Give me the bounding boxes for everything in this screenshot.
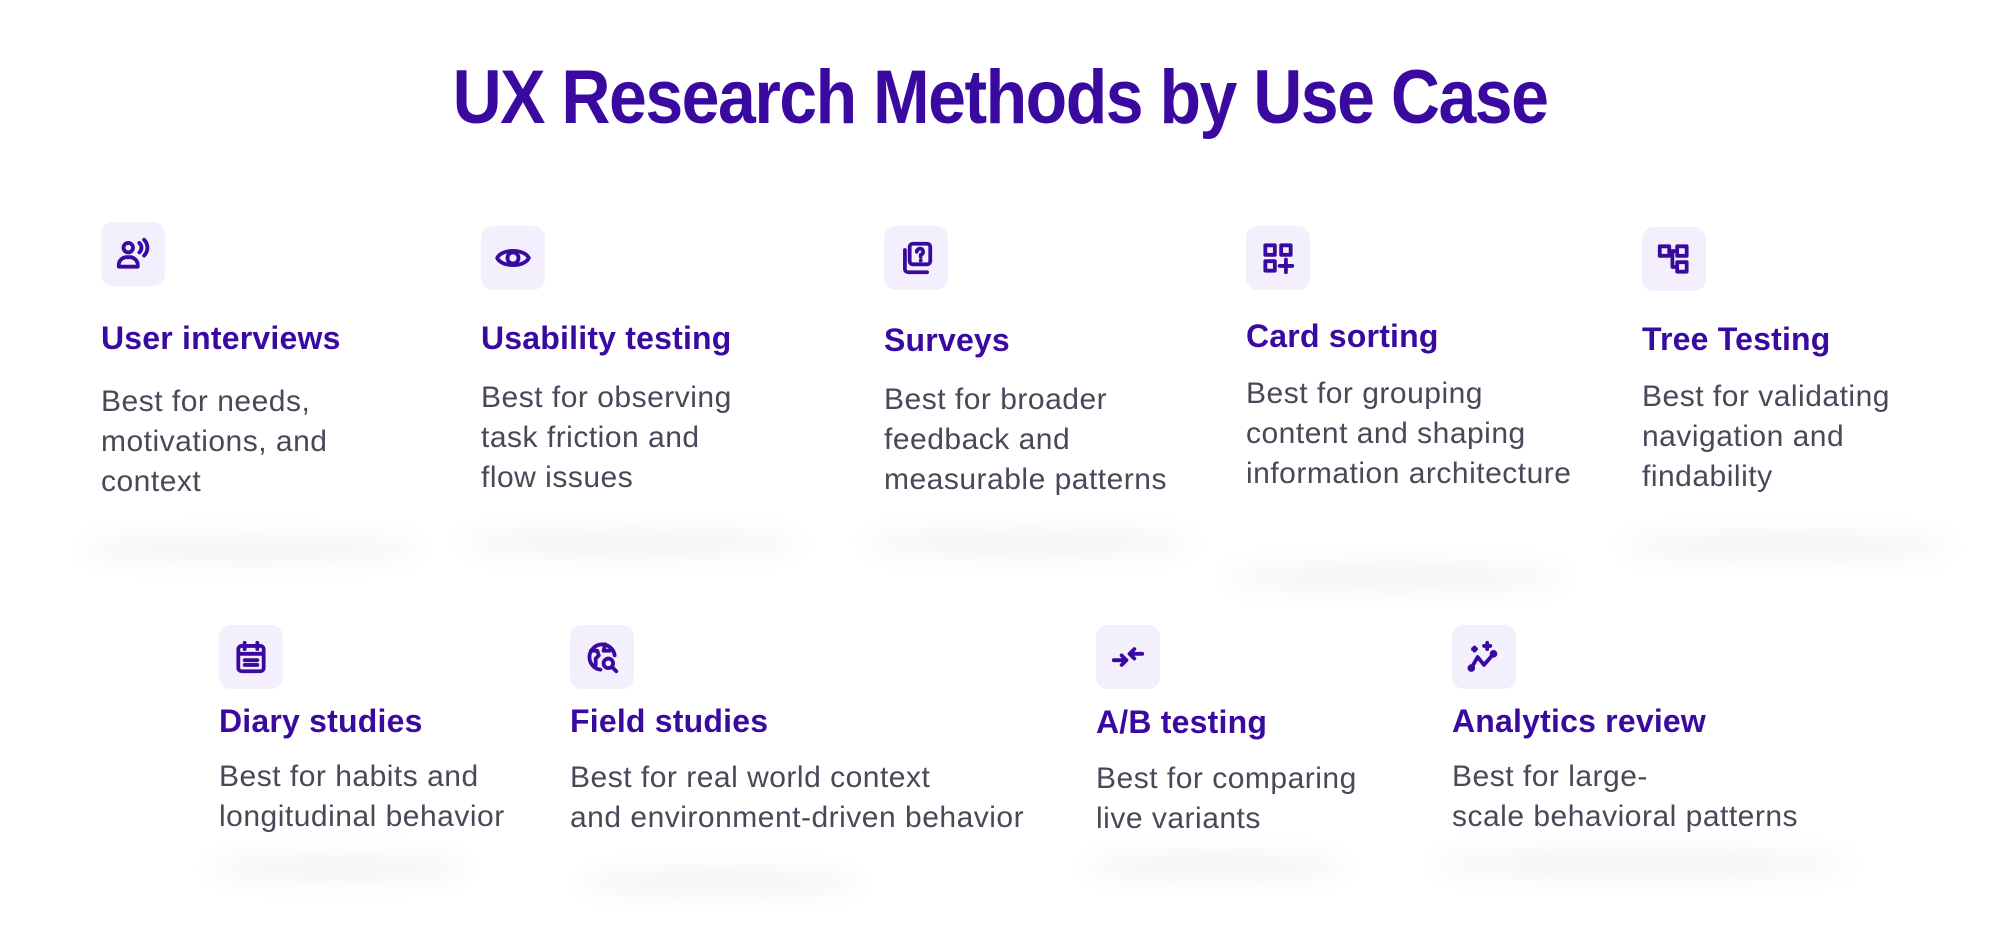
body: Best for large- <box>1452 760 1648 793</box>
card: card sorting <box>1246 226 1571 582</box>
heading: Surveys <box>884 322 1010 358</box>
heading: Field studies <box>570 703 768 739</box>
body <box>1452 760 1798 833</box>
card: usability testing <box>481 226 732 548</box>
body: live variants <box>1096 802 1261 835</box>
body: scale behavioral patterns <box>1452 800 1798 833</box>
heading: User interviews <box>101 320 341 356</box>
body <box>884 383 1167 496</box>
body: flow issues <box>481 461 633 494</box>
body: and environment-driven behavior <box>570 801 1024 834</box>
icon: converging arrows <box>1096 625 1160 689</box>
body: task friction and <box>481 421 700 454</box>
title: UX Research Methods by Use Case <box>453 54 1547 140</box>
heading: A/B testing <box>1096 704 1267 740</box>
body: Best for validating <box>1642 380 1890 413</box>
card: diary studies <box>219 625 505 873</box>
body: content and shaping <box>1246 417 1526 450</box>
icon: calendar <box>219 625 283 689</box>
card: analytics review <box>1452 625 1798 870</box>
card: a/b testing <box>1096 625 1357 871</box>
heading: Tree Testing <box>1642 321 1831 357</box>
heading: Usability testing <box>481 320 732 356</box>
body: Best for observing <box>481 381 732 414</box>
body <box>1246 377 1571 490</box>
icon: globe search <box>570 625 634 689</box>
icon: tree nodes <box>1642 227 1706 291</box>
body <box>570 761 1024 834</box>
body: findability <box>1642 460 1773 493</box>
heading: Analytics review <box>1452 703 1706 739</box>
body <box>219 760 505 833</box>
heading: Card sorting <box>1246 318 1439 354</box>
body: longitudinal behavior <box>219 800 505 833</box>
body: Best for needs, <box>101 385 310 418</box>
body: Best for real world context <box>570 761 930 794</box>
card: surveys <box>884 226 1167 548</box>
body: navigation and <box>1642 420 1844 453</box>
body <box>1642 380 1890 493</box>
icon: sparkle line chart <box>1452 625 1516 689</box>
card: field studies <box>570 625 1024 887</box>
icon: squares plus <box>1246 226 1310 290</box>
body: Best for grouping <box>1246 377 1483 410</box>
body <box>101 385 327 498</box>
body: Best for comparing <box>1096 762 1357 795</box>
body: motivations, and <box>101 425 327 458</box>
body <box>481 381 732 494</box>
icon: question cards <box>884 226 948 290</box>
card: tree testing <box>1642 227 1890 551</box>
body: measurable patterns <box>884 463 1167 496</box>
icon: eye <box>481 226 545 290</box>
heading: Diary studies <box>219 703 423 739</box>
body: feedback and <box>884 423 1070 456</box>
body: information architecture <box>1246 457 1571 490</box>
card: user interviews <box>101 222 341 554</box>
body <box>1096 762 1357 835</box>
icon: person speaking <box>101 222 165 286</box>
body: Best for broader <box>884 383 1107 416</box>
body: Best for habits and <box>219 760 479 793</box>
body: context <box>101 465 201 498</box>
